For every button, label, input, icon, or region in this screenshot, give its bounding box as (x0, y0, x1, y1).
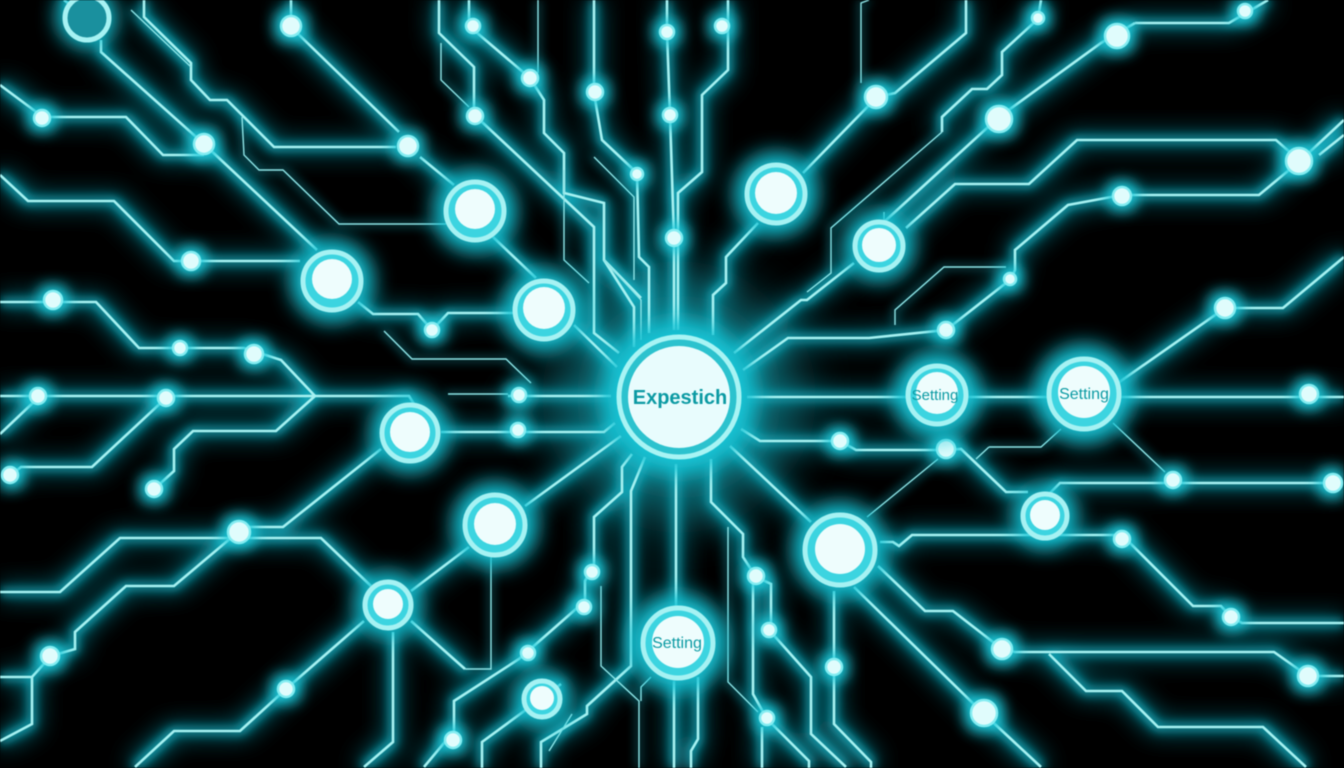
node: Setting right large: Setting (1059, 386, 1109, 403)
node: upper right large (734, 152, 818, 236)
node: Setting bottom: Setting (652, 635, 702, 652)
central node: Expestich: Expestich (633, 387, 727, 409)
node: centre left (370, 393, 450, 473)
node: lower centre left (452, 482, 538, 568)
node: upper left large (433, 169, 517, 253)
node: near centre upper left (502, 268, 586, 352)
node: right medium (1012, 483, 1078, 549)
node: Setting right large (1034, 344, 1134, 444)
node: lower right large (792, 502, 888, 598)
node: bottom small (513, 670, 571, 728)
node: Setting right small: Setting (912, 387, 958, 404)
thin trace glow (131, 0, 1165, 768)
central node: Expestich (601, 319, 757, 475)
node: upper right medium (843, 210, 915, 282)
node: left large (290, 239, 374, 323)
node: Setting right small (893, 351, 981, 439)
node: Setting bottom (628, 593, 728, 693)
central glow (559, 277, 799, 517)
node: top-left ring (57, 0, 117, 48)
node: lower left (354, 571, 422, 639)
thin secondary traces (131, 0, 1165, 768)
